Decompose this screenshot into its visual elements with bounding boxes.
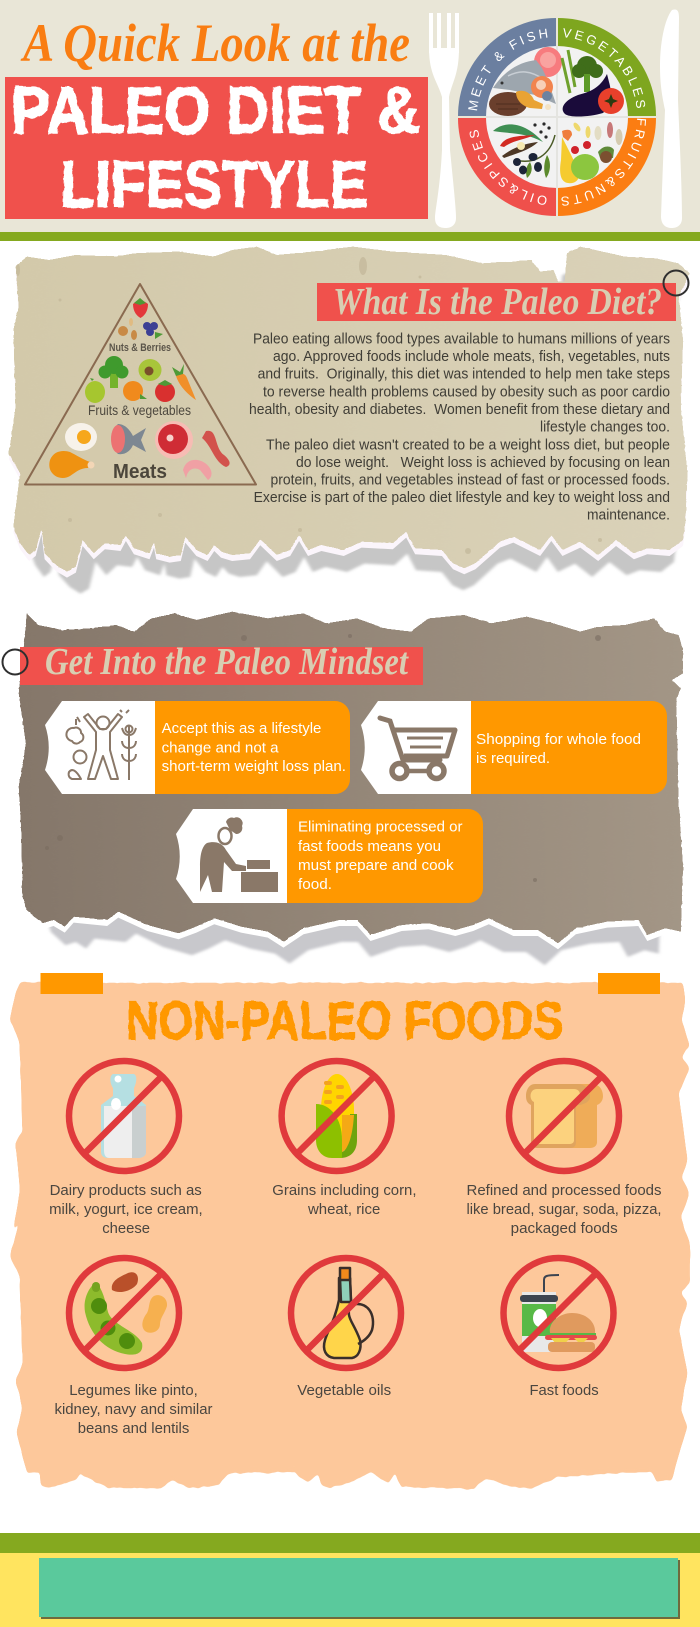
paper speckles: [45, 634, 601, 882]
card text: [476, 731, 641, 767]
no symbol: [504, 1258, 614, 1368]
section heading: what is the paleo diet: What Is the Paleo Diet?: [333, 281, 662, 323]
no symbol: [509, 1061, 619, 1171]
item: dairy: [49, 1061, 203, 1237]
item: legumes: [54, 1258, 212, 1437]
card text: Eliminating processed or: [298, 819, 463, 836]
icon: corn: [316, 1074, 357, 1158]
no symbol: [282, 1061, 392, 1171]
panel: what is the paleo diet: [9, 247, 690, 594]
footer background: [0, 1553, 700, 1627]
icon: bread: [526, 1084, 603, 1148]
icon: pea pod, bean and peanut: [85, 1272, 167, 1355]
label: Legumes like pinto,: [69, 1382, 198, 1399]
icon: orange: [123, 381, 147, 401]
item: fast foods: [504, 1258, 614, 1399]
label: [466, 1182, 662, 1237]
label: Vegetable oils: [297, 1382, 391, 1399]
icon: oil bottle: [324, 1268, 373, 1358]
no symbol: [291, 1258, 401, 1368]
paper speckles: [16, 257, 602, 554]
icon: person with food: [66, 710, 136, 780]
panel: non-paleo foods: [10, 973, 690, 1488]
torn peach sheet: [10, 983, 690, 1488]
icon: steak: [155, 421, 193, 459]
pyramid tier label: fruits and vegetables: Fruits & vegetables: [88, 402, 191, 418]
icon: broccoli: [98, 356, 128, 388]
card: shopping: [361, 701, 667, 794]
card text: [298, 819, 463, 893]
plate segment: fruits and nuts: [558, 118, 656, 216]
icon: blueberries: [143, 322, 163, 339]
torn paper sheet: [19, 612, 683, 943]
tape: left: [40, 973, 103, 994]
no symbol: [69, 1061, 179, 1171]
food: vegetables: [562, 50, 624, 117]
segment labels: MEET & FISH: [468, 28, 548, 110]
torn paper sheet: [9, 247, 690, 572]
card body: [154, 701, 350, 794]
icon: egg: [65, 423, 97, 451]
label: beans and lentils: [78, 1420, 189, 1437]
icon: knife: [660, 9, 682, 228]
card text: fast foods means you: [298, 838, 441, 855]
paper under-edge: [19, 618, 683, 949]
card text: change and not a: [162, 740, 279, 757]
text block: paleo diet description: Exercise is part of the paleo diet lifestyle and key to weight loss and: [254, 490, 670, 506]
tape: right: [598, 973, 660, 994]
label: Dairy products such as: [50, 1182, 202, 1199]
label: [49, 1182, 203, 1237]
label: like bread, sugar, soda, pizza,: [466, 1201, 662, 1218]
icon: avocado: [138, 359, 162, 381]
card text: is required.: [476, 750, 550, 767]
pyramid tier label: nuts and berries: Nuts & Berries: [109, 342, 171, 354]
card text: food.: [298, 876, 332, 893]
text block: paleo diet description: and fruits. Originally, this diet was intended to help men take steps: [258, 367, 670, 383]
header background: [0, 0, 700, 232]
item: processed foods: [466, 1061, 662, 1237]
footer green bar: [0, 1533, 700, 1553]
icon: fork: [429, 13, 459, 228]
food pyramid chart: [25, 284, 256, 484]
card: prepare and cook: [176, 809, 483, 903]
label: Fast foods: [530, 1382, 599, 1399]
text block: paleo diet description: ago. Approved foods include whole meats, fish, vegetables, nuts: [273, 349, 670, 365]
segment labels: FRUITS&NUTS: [561, 118, 646, 206]
pyramid outline: [25, 284, 256, 484]
plate centre: [486, 46, 628, 188]
plate divider: [486, 46, 628, 188]
food: oil and spices: [493, 122, 555, 178]
label: kidney, navy and similar: [54, 1401, 212, 1418]
item: vegetable oils: [291, 1258, 401, 1399]
card icon tab: [361, 701, 471, 794]
label: [272, 1182, 416, 1218]
segment labels: OIL&SPICES: [470, 130, 546, 205]
text block: paleo diet description: maintenance.: [587, 508, 670, 524]
label: milk, yogurt, ice cream,: [49, 1201, 203, 1218]
label: wheat, rice: [307, 1201, 380, 1218]
footer teal panel shadow: [41, 1560, 680, 1619]
plate segment: vegetables: [558, 18, 656, 116]
segment labels: VEGETABLES: [563, 28, 646, 108]
footer teal panel: [39, 1558, 678, 1617]
card text: Shopping for whole food: [476, 731, 641, 748]
card icon tab: [45, 701, 155, 794]
plate segment: oil and spices: [458, 118, 556, 216]
section heading: get into the paleo mindset: Get Into the Paleo Mindset: [45, 641, 409, 683]
title line: Paleo Diet &: PALEO DIET &: [11, 73, 420, 147]
icon: nuts: [118, 318, 137, 340]
icon: bacon: [202, 431, 230, 467]
paper shadow: [43, 634, 661, 965]
decorative pin ring: [664, 270, 688, 296]
text block: paleo diet description: to reverse health problems caused by obesity such as poor cardio: [263, 384, 670, 400]
icon: carrot: [172, 364, 196, 400]
food: fruits and nuts: [560, 121, 622, 183]
text block: paleo diet description: health, obesity and diabetes. Women benefit from these dietary and: [249, 402, 670, 418]
icon: strawberry: [133, 298, 148, 318]
label: [54, 1382, 212, 1437]
pyramid tier label: meats: Meats: [113, 461, 167, 483]
text block: paleo diet description: [249, 331, 670, 524]
icon: chef cooking: [200, 817, 278, 892]
card text: Accept this as a lifestyle: [162, 720, 321, 737]
icon: shopping cart: [380, 718, 455, 778]
paper shadow: [25, 269, 680, 594]
text block: paleo diet description: lifestyle changes too.: [540, 420, 670, 436]
food: fish and meat: [489, 47, 562, 116]
icon: chicken leg: [49, 451, 94, 478]
plate chart: [458, 18, 656, 216]
icon: fish steak: [111, 424, 146, 454]
text block: paleo diet description: do lose weight. Weight loss is achieved by focusing on lean: [296, 455, 670, 471]
icon: drink and burger: [520, 1275, 597, 1352]
item: grains: [272, 1061, 416, 1218]
card text: short-term weight loss plan.: [162, 758, 346, 775]
text block: paleo diet description: protein, fruits, and vegetables instead of fast or processed foods.: [270, 473, 670, 489]
text block: paleo diet description: The paleo diet wasn't created to be a weight loss diet, but people: [266, 437, 670, 453]
text block: paleo diet description: Paleo eating allows food types available to humans millions of years: [253, 331, 670, 347]
section heading: non-paleo foods: NON-PALEO FOODS: [126, 991, 563, 1051]
label: packaged foods: [511, 1220, 618, 1237]
label: Refined and processed foods: [466, 1182, 662, 1199]
card icon tab: [176, 809, 287, 903]
icon: milk bottle: [101, 1074, 146, 1158]
header green divider bar: [0, 232, 700, 241]
decorative pin ring: [2, 650, 28, 674]
icon: shrimp: [183, 460, 212, 480]
card text: [162, 720, 346, 775]
card body: [286, 809, 483, 903]
card text: must prepare and cook: [298, 857, 454, 874]
paper under-edge: [9, 253, 690, 578]
card: lifestyle change: [45, 701, 350, 794]
title banner: [5, 73, 428, 221]
title: A Quick Look at the: A Quick Look at the: [20, 13, 410, 73]
icon: tomato: [155, 380, 175, 402]
label: cheese: [102, 1220, 150, 1237]
no symbol: [69, 1258, 179, 1368]
plate segment: meat and fish: [458, 18, 556, 116]
icon: green apple: [85, 378, 105, 403]
panel: get into the paleo mindset: [2, 612, 683, 965]
label: Grains including corn,: [272, 1182, 416, 1199]
card body: [470, 701, 667, 794]
segment labels: [468, 28, 646, 206]
title line: Lifestyle: LIFESTYLE: [60, 147, 368, 221]
